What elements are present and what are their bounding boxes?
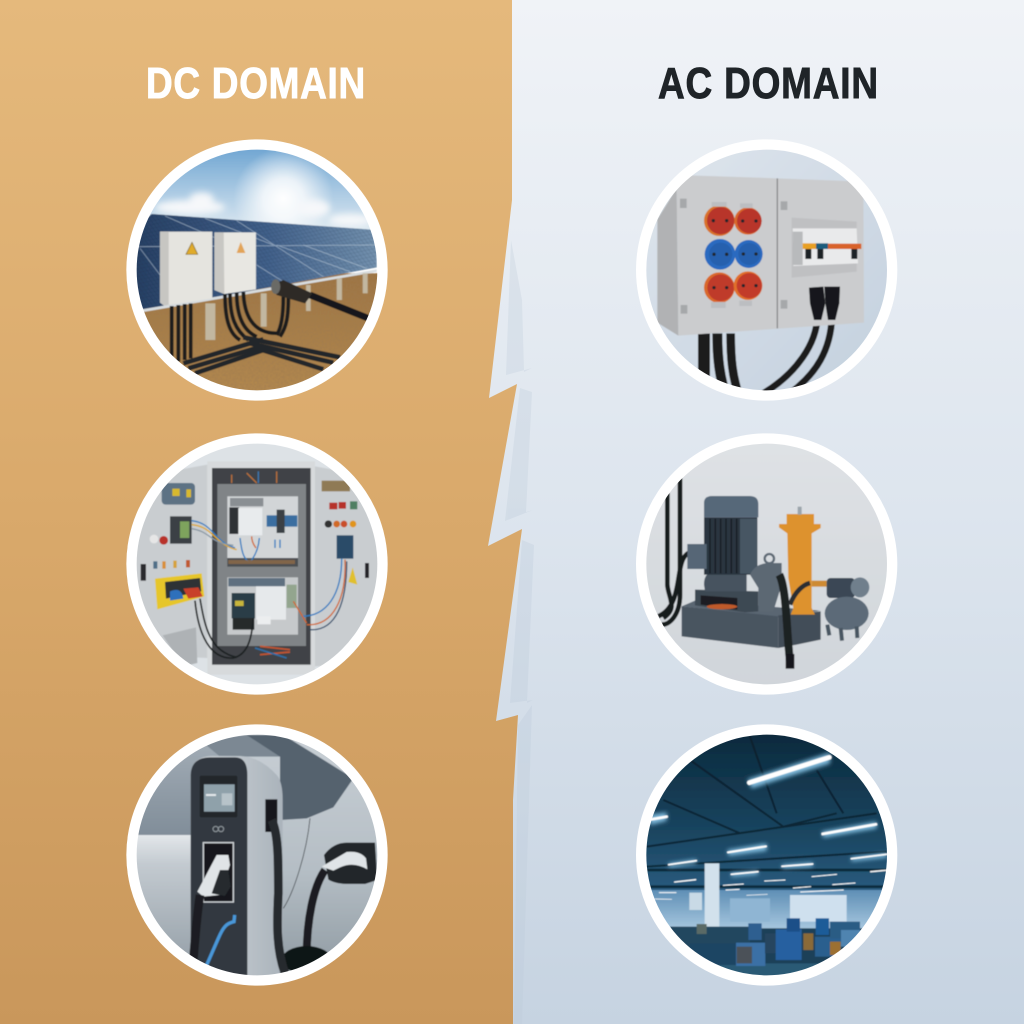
heading: DC domain: DC DOMAIN [146,58,365,108]
lightning divider shadow facets [505,240,534,1024]
circuit breaker [792,218,861,278]
right door devices [322,481,369,585]
heading: AC domain: AC DOMAIN [658,58,878,108]
ceiling light tubes [650,753,887,899]
photo circle: control cabinet with wiring [126,433,388,695]
factory machines [670,918,860,966]
photo circle: solar array with DC combiner boxes [126,139,388,401]
panel: DC domain background with lightning edge [0,0,522,1024]
breakers and modules [228,498,297,630]
photo circle: EV charging station [126,724,388,986]
photo circle: electric motor pump unit [636,433,897,695]
warning triangles [186,242,245,254]
photo circle: AC socket distribution panel [636,139,897,401]
left door devices [141,483,204,609]
socket grid [704,202,763,308]
plugs [809,287,840,320]
photo circle: factory hall with ceiling lights [636,724,897,986]
